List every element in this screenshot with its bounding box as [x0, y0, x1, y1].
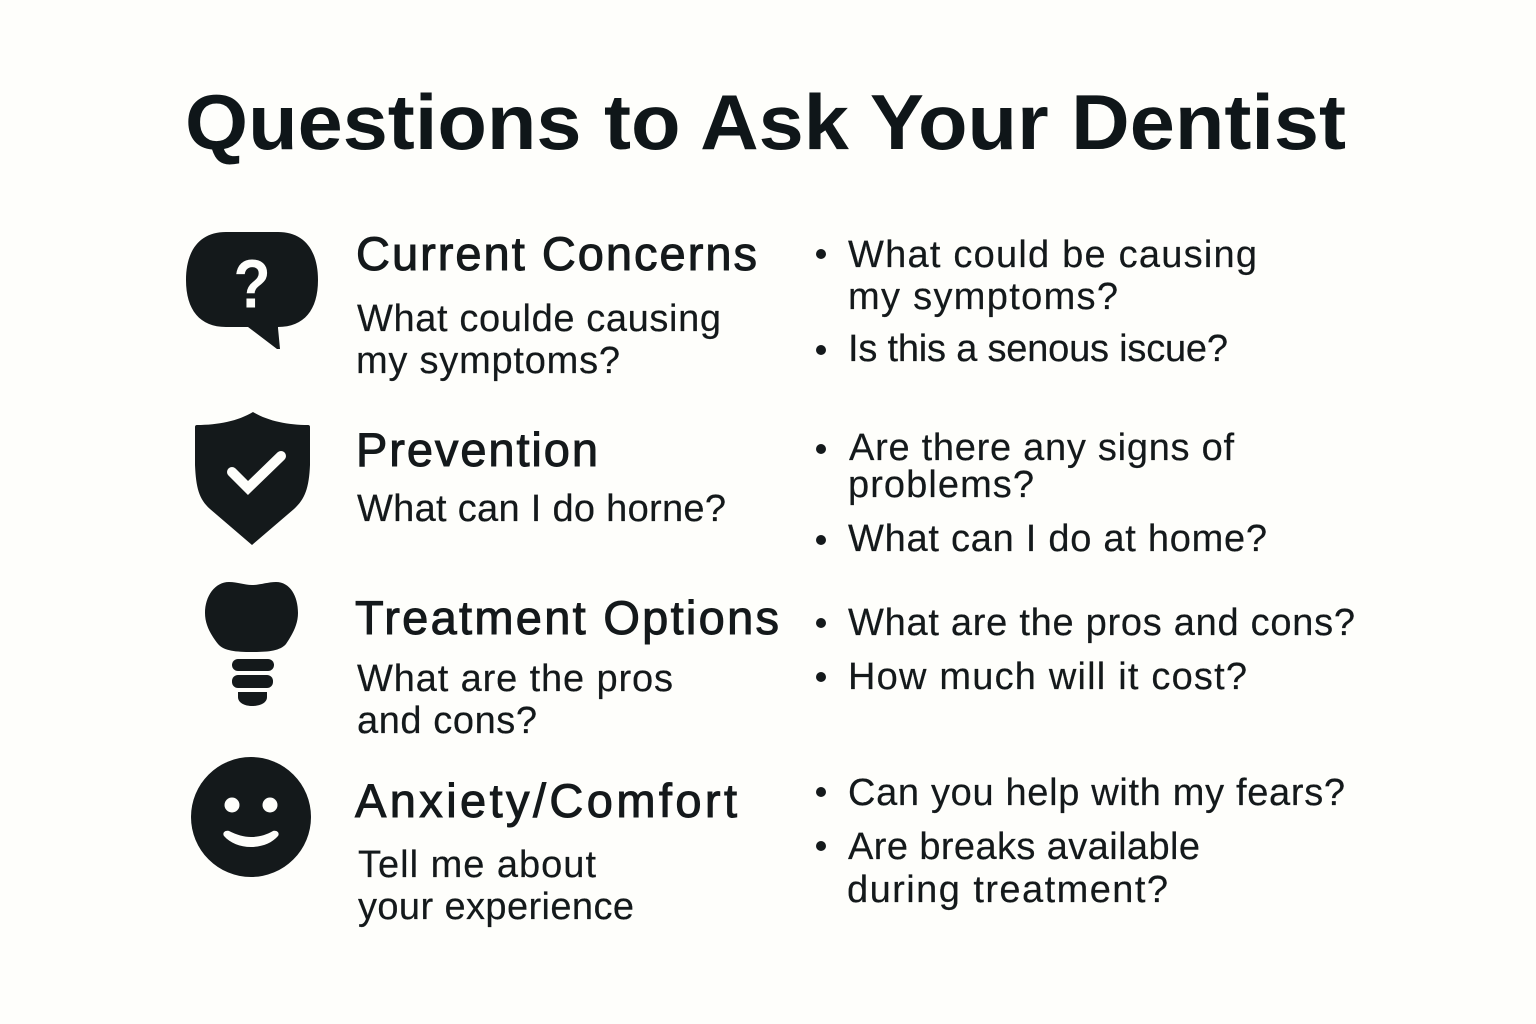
heading: prevention: Prevention [356, 423, 598, 476]
bullet list: anxiety and comfort: during treatment? [847, 869, 1168, 911]
text: anxiety and comfort summary: Tell me about [358, 844, 596, 886]
icon: shield with check [195, 412, 310, 545]
row: anxiety and comfort [191, 757, 1345, 928]
bullet list: treatment options: What are the pros and cons? [848, 602, 1355, 644]
text: anxiety and comfort summary [358, 844, 634, 928]
bullet list: anxiety and comfort [816, 772, 1345, 911]
heading: current concerns: Current Concerns [356, 227, 757, 280]
text: treatment options summary: and cons? [357, 700, 537, 742]
heading: treatment options: Treatment Options [355, 591, 779, 644]
row: treatment options [205, 582, 1355, 742]
heading: anxiety and comfort: Anxiety/Comfort [355, 774, 737, 827]
bullet list: treatment options: How much will it cost? [848, 656, 1247, 698]
bullet list: anxiety and comfort: Are breaks available [848, 826, 1200, 868]
text: current concerns summary: my symptoms? [356, 340, 620, 382]
icon: speech bubble with question mark: ? [233, 245, 271, 322]
text: current concerns summary [356, 298, 721, 382]
text: anxiety and comfort summary: your experience [358, 886, 634, 928]
row: prevention [195, 412, 1267, 560]
bullet list: prevention [816, 427, 1267, 560]
bullet list: treatment options [816, 602, 1355, 698]
bullet list: prevention: Are there any signs of [849, 427, 1234, 469]
icon: smiling face [191, 757, 311, 877]
bullet list: current concerns: Is this a senous iscue? [848, 328, 1228, 370]
icon: dental implant [205, 582, 298, 706]
bullet list: current concerns [816, 234, 1257, 370]
text: prevention summary: What can I do horne? [357, 488, 726, 530]
bullet list: prevention: What can I do at home? [848, 518, 1267, 560]
row: current concerns [186, 227, 1257, 382]
text: treatment options summary: What are the pros [357, 658, 673, 700]
text: treatment options summary [357, 658, 673, 742]
bullet list: current concerns: What could be causing [848, 234, 1257, 276]
icon: speech bubble with question mark [186, 232, 318, 349]
bullet list: current concerns: my symptoms? [848, 276, 1118, 318]
bullet list: prevention: problems? [848, 464, 1034, 506]
bullet list: anxiety and comfort: Can you help with my fears? [848, 772, 1345, 814]
text: current concerns summary: What coulde causing [357, 298, 721, 340]
title: Questions to Ask Your Dentist [185, 78, 1346, 166]
